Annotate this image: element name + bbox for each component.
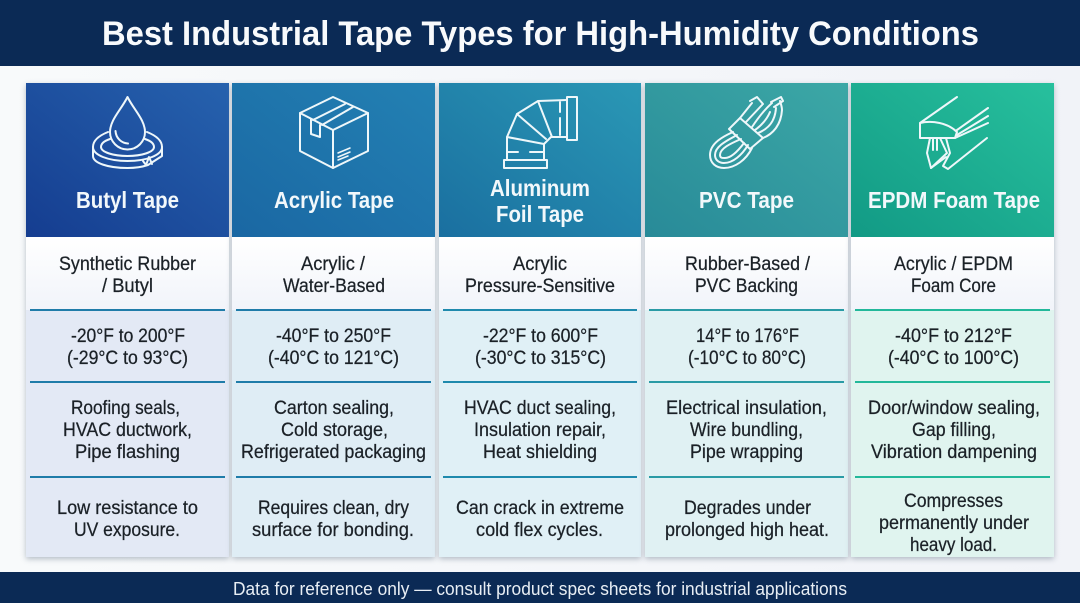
limitation <box>456 498 624 541</box>
backing material: Synthetic Rubber <box>59 254 197 275</box>
applications: Gap filling, <box>912 420 996 441</box>
panel: EPDM Foam Tape <box>851 83 1054 559</box>
icon: duct elbow <box>504 97 577 168</box>
backing material <box>894 254 1013 297</box>
header: Aluminum Foil Tape <box>439 83 641 237</box>
applications: Carton sealing, <box>274 398 394 419</box>
panel: PVC Tape <box>645 83 848 559</box>
heading: Aluminum Foil Tape <box>490 175 590 227</box>
applications: Heat shielding <box>483 442 597 463</box>
temperature range <box>888 326 1019 369</box>
temperature range: -22°F to 600°F <box>483 326 598 347</box>
applications: HVAC duct sealing, <box>464 398 616 419</box>
limitation: Requires clean, dry <box>258 498 409 519</box>
temperature range: -20°F to 200°F <box>71 326 185 347</box>
backing material <box>59 254 197 297</box>
limitation: Degrades under <box>684 498 812 519</box>
temperature range: -40°F to 212°F <box>895 326 1012 347</box>
header: EPDM Foam Tape <box>851 83 1054 237</box>
applications: Vibration dampening <box>871 442 1037 463</box>
header: Butyl Tape <box>26 83 229 237</box>
applications: HVAC ductwork, <box>63 420 192 441</box>
heading: PVC Tape: PVC Tape <box>699 187 794 213</box>
applications: Cold storage, <box>281 420 388 441</box>
backing material <box>465 254 615 297</box>
applications <box>63 398 192 463</box>
temperature range: 14°F to 176°F <box>696 326 799 347</box>
applications: Roofing seals, <box>71 398 180 419</box>
backing material <box>283 254 385 297</box>
temperature range: (-29°C to 93°C) <box>67 348 188 369</box>
applications: Wire bundling, <box>690 420 803 441</box>
icon: water drop on tape roll <box>93 97 162 168</box>
temperature range: (-40°C to 121°C) <box>268 348 399 369</box>
limitation: UV exposure. <box>74 520 180 541</box>
icon: wire bundle <box>710 97 783 168</box>
applications: Electrical insulation, <box>666 398 827 419</box>
heading: Butyl Tape: Butyl Tape <box>76 187 179 213</box>
applications: Door/window sealing, <box>868 398 1040 419</box>
limitation <box>665 498 829 541</box>
backing material: Water-Based <box>283 276 385 297</box>
limitation: prolonged high heat. <box>665 520 829 541</box>
applications: Refrigerated packaging <box>241 442 426 463</box>
backing material: Foam Core <box>911 276 996 297</box>
temperature range: (-40°C to 100°C) <box>888 348 1019 369</box>
limitation: surface for bonding. <box>252 520 414 541</box>
backing material: Acrylic <box>513 254 567 275</box>
applications: Pipe flashing <box>75 442 180 463</box>
header: Acrylic Tape <box>232 83 435 237</box>
panel: Aluminum Foil Tape <box>439 83 641 559</box>
limitation: permanently under <box>879 513 1030 534</box>
temperature range <box>475 326 606 369</box>
applications: Pipe wrapping <box>690 442 803 463</box>
heading: Aluminum Foil Tape: Aluminum <box>490 175 590 201</box>
footer note <box>0 572 1080 603</box>
applications <box>868 398 1040 463</box>
applications <box>464 398 616 463</box>
temperature range: -40°F to 250°F <box>276 326 391 347</box>
panel: Butyl Tape <box>26 83 229 559</box>
backing material: Rubber-Based / <box>685 254 811 275</box>
backing material: Acrylic / EPDM <box>894 254 1013 275</box>
limitation <box>57 498 198 541</box>
applications <box>666 398 827 463</box>
header: PVC Tape <box>645 83 848 237</box>
limitation: heavy load. <box>910 535 997 556</box>
panel: Acrylic Tape <box>232 83 435 559</box>
limitation: cold flex cycles. <box>476 520 603 541</box>
temperature range: (-30°C to 315°C) <box>475 348 606 369</box>
backing material <box>685 254 811 297</box>
limitation: Compresses <box>904 491 1003 512</box>
limitation: Can crack in extreme <box>456 498 624 519</box>
applications <box>241 398 426 463</box>
heading: Aluminum Foil Tape: Foil Tape <box>496 201 584 227</box>
backing material: PVC Backing <box>695 276 798 297</box>
applications: Insulation repair, <box>474 420 606 441</box>
temperature range: (-10°C to 80°C) <box>688 348 806 369</box>
heading: EPDM Foam Tape: EPDM Foam Tape <box>868 187 1040 213</box>
icon: cardboard box <box>300 97 368 168</box>
title banner <box>0 0 1080 66</box>
footer note: Data for reference only — consult product spec sheets for industrial applications <box>233 579 847 599</box>
backing material: Pressure-Sensitive <box>465 276 615 297</box>
temperature range <box>688 326 806 369</box>
limitation: Low resistance to <box>57 498 198 519</box>
limitation <box>879 491 1030 556</box>
icon: foam seal strip <box>920 97 988 169</box>
temperature range <box>67 326 188 369</box>
title banner: Best Industrial Tape Types for High-Humidity Conditions <box>102 15 979 53</box>
limitation <box>252 498 414 541</box>
backing material: / Butyl <box>102 276 153 297</box>
heading: Acrylic Tape: Acrylic Tape <box>274 187 394 213</box>
backing material: Acrylic / <box>301 254 366 275</box>
temperature range <box>268 326 399 369</box>
